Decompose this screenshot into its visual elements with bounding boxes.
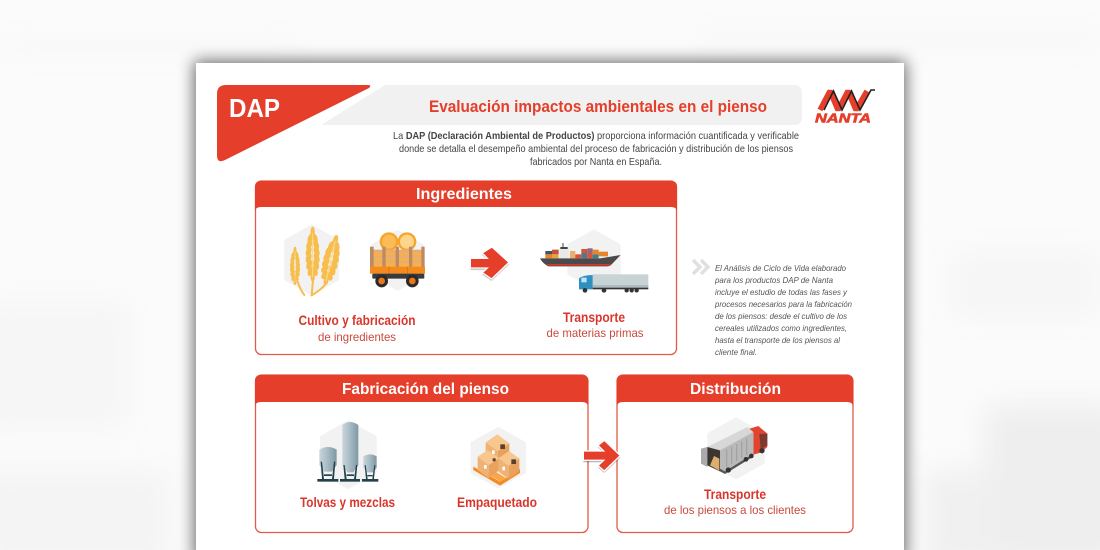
header badge: DAP: DAP: [229, 93, 280, 123]
icon: delivery truck: [701, 419, 767, 478]
label: Transporte de los piensos a los clientes: Transporte: [704, 487, 766, 502]
side note text: hasta el transporte de los piensos al: [715, 335, 841, 345]
heading: Fabricación del pienso: Fabricación del pienso: [342, 381, 509, 398]
label: Transporte de los piensos a los clientes: [664, 487, 806, 517]
header badge: DAP: [217, 85, 370, 161]
side note text: cliente final.: [715, 347, 757, 357]
label: Transporte de materias primas: Transporte: [563, 310, 625, 325]
side note text: procesos necesarios para la fabricación: [714, 299, 852, 309]
label: Transporte de materias primas: de materias primas: [546, 326, 644, 340]
icon: wheat: [286, 226, 346, 295]
side note text: para los productos DAP de Nanta: [714, 275, 833, 285]
intro text: [393, 130, 799, 168]
arrow: to distribution: [583, 440, 620, 473]
label: Cultivo y fabricación de ingredientes: [298, 313, 416, 344]
panel header: Ingredientes: [255, 181, 677, 212]
icon: trailer: [370, 231, 425, 289]
icon: boxes: [472, 428, 525, 487]
logo: Nanta: NANTA: [815, 112, 871, 126]
intro text: fabricados por Nanta en España.: [530, 156, 662, 168]
intro text: donde se detalla el desempeño ambiental del proceso de fabricación y distribución de los piensos: [399, 143, 793, 155]
panel header: Fabricación: [255, 375, 588, 407]
heading: Distribución: Distribución: [690, 381, 781, 398]
side note text: El Análisis de Ciclo de Vida elaborado: [715, 263, 846, 273]
icon: ship and truck: [540, 231, 648, 293]
title band: [322, 85, 802, 125]
panel header: Distribución: [617, 375, 853, 407]
icon: double chevron: [693, 260, 708, 274]
icon: silos: [317, 422, 378, 488]
label: Transporte de los piensos a los clientes: de los piensos a los clientes: [664, 503, 806, 517]
panel: Ingredientes: [255, 181, 677, 354]
panel: Fabricación del pienso: [255, 375, 588, 532]
side note text: incluye el estudio de todas las fases y: [715, 287, 848, 297]
arrow: to transport: [470, 247, 509, 281]
document page: [196, 63, 904, 550]
title band: Evaluación impactos ambientales en el pienso: [429, 97, 767, 116]
label: Cultivo y fabricación de ingredientes: de ingredientes: [318, 330, 396, 344]
label: Cultivo y fabricación de ingredientes: Cultivo y fabricación: [298, 313, 416, 328]
page shadow: [194, 61, 906, 550]
side note: [693, 260, 852, 357]
label: Empaquetado: Empaquetado: [457, 495, 537, 510]
panel: Distribución: [617, 375, 853, 532]
side note text: cereales utilizados como ingredientes,: [715, 323, 847, 333]
logo: Nanta: [815, 90, 875, 126]
side note text: de los piensos: desde el cultivo de los: [715, 311, 848, 321]
label: Transporte de materias primas: [546, 310, 644, 340]
intro text: La DAP (Declaración Ambiental de Productos) proporciona información cuantificada y verificable: [393, 130, 799, 142]
heading: Ingredientes: Ingredientes: [416, 186, 512, 203]
side note text: [714, 263, 852, 357]
label: Tolvas y mezclas: Tolvas y mezclas: [300, 495, 395, 510]
